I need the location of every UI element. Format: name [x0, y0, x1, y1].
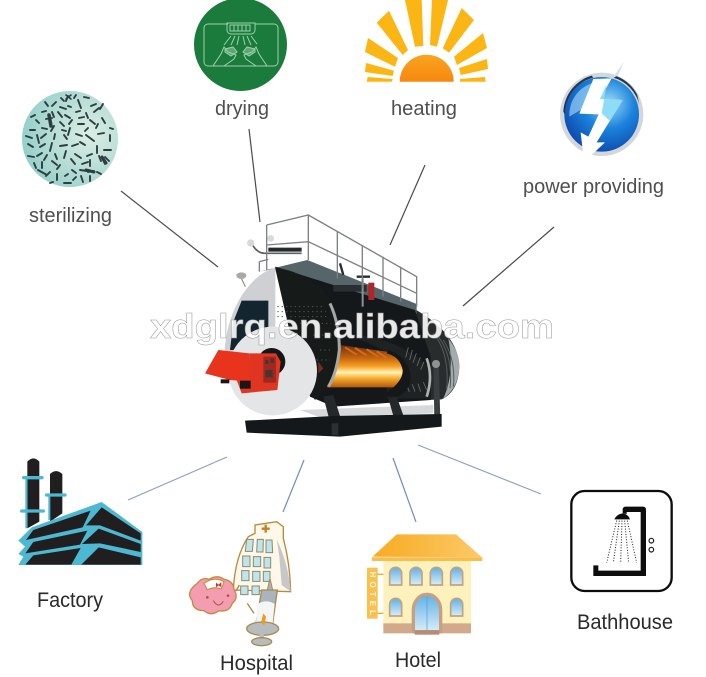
syringe mascot [236, 578, 279, 646]
icon: hotel [367, 534, 482, 635]
pipes and gauges [236, 235, 374, 307]
hospital building [233, 522, 291, 595]
icon: power lightning orb [560, 62, 643, 163]
hotel windows [390, 567, 463, 616]
label: Bathhouse: Bathhouse [577, 611, 673, 634]
label: sterilizing: sterilizing [29, 205, 112, 227]
icon: factory [18, 458, 142, 565]
connector lines [121, 129, 554, 522]
hotel roof [372, 534, 482, 561]
icon: drying hand dryer [194, 0, 287, 91]
front disc [225, 267, 317, 415]
label: Hotel: Hotel [395, 649, 441, 672]
hotel door [413, 594, 441, 635]
boiler illustration [205, 215, 459, 437]
nurse mascot [190, 577, 236, 614]
watermark: xdglrq.en.alibaba.com [150, 308, 554, 346]
label: Factory: Factory [37, 589, 103, 612]
dark body [275, 267, 431, 407]
label: Hospital: Hospital [220, 652, 293, 675]
smokestacks [20, 458, 67, 528]
factory building [18, 502, 142, 565]
icon: sterilizing bacteria [22, 91, 118, 187]
top deck [259, 260, 417, 314]
front drum [275, 267, 340, 400]
furnace flame [327, 345, 411, 397]
label: heating: heating [391, 98, 457, 120]
ribbed burner section [347, 333, 440, 420]
burner [205, 350, 281, 393]
label: power providing: power providing [523, 176, 664, 198]
icon: bathhouse shower [571, 491, 672, 591]
icon: hospital [190, 522, 291, 646]
legs and skid base [245, 395, 442, 437]
rear ribbed drum [367, 308, 459, 403]
label: drying: drying [215, 98, 269, 120]
guard rail [259, 215, 417, 307]
hotel walls [383, 558, 471, 623]
icon: heating sun [365, 0, 488, 82]
hotel sign: HOTEL [368, 572, 377, 615]
